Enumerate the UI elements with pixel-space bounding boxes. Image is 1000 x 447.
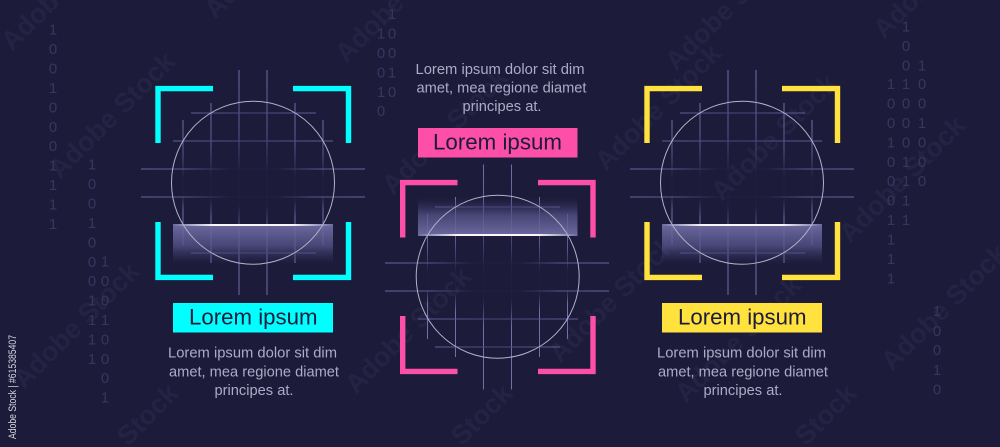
description text: Lorem ipsum dolor sit dim — [168, 346, 337, 362]
watermark pattern: Adobe Stock — [543, 230, 682, 368]
binary column: far left: 1 — [49, 196, 57, 214]
binary column: left third: 0 — [101, 332, 109, 348]
description text: principes at. — [462, 99, 542, 115]
binary column: far left: 1 — [49, 177, 57, 194]
binary column: left second: 1 — [88, 215, 96, 232]
binary column: top middle A: 0 — [377, 64, 385, 82]
description text: amet, mea regione diamet — [416, 81, 586, 97]
binary column: top middle B: 1 — [388, 64, 396, 82]
binary column: right second: 1 — [902, 18, 910, 36]
binary column: lower right: 0 — [933, 323, 941, 340]
description text: principes at. — [214, 383, 294, 399]
viewfinder brackets — [403, 183, 593, 371]
binary column: right second: 0 — [902, 96, 910, 112]
description text: Lorem ipsum dolor sit dim — [416, 62, 584, 78]
binary column: far left: 0 — [49, 119, 57, 136]
binary column: right first: 1 — [887, 270, 895, 288]
binary column: top middle A: 1 — [377, 26, 385, 42]
watermark pattern: Adobe Stock — [376, 62, 515, 200]
binary column: right first: 1 — [887, 212, 895, 229]
binary column: right first: 0 — [887, 173, 895, 190]
glow platform — [418, 198, 578, 236]
binary column: left third: 0 — [101, 292, 109, 310]
heading label: Lorem ipsum — [189, 304, 318, 330]
binary column: right first: 1 — [887, 251, 895, 268]
description text: amet, mea regione diamet — [658, 364, 828, 380]
binary column: left second: 0 — [88, 234, 96, 252]
binary column: right second: 1 — [902, 154, 910, 171]
description text — [657, 346, 828, 399]
binary column: lower right: 0 — [933, 342, 941, 359]
watermark pattern: Adobe Stock — [833, 110, 972, 248]
binary column: right third: 0 — [918, 96, 926, 112]
binary column: left second: 0 — [88, 273, 96, 290]
binary column: top middle B: 1 — [388, 6, 396, 23]
viewfinder brackets — [647, 89, 838, 277]
binary column: right second: 1 — [902, 192, 910, 210]
binary column: lower right: 1 — [933, 362, 941, 379]
binary column: top middle B: 0 — [388, 45, 396, 62]
binary column: left third: 1 — [101, 312, 109, 329]
binary column: lower right: 1 — [933, 303, 941, 320]
watermark pattern: Adobe Stock — [7, 256, 146, 394]
binary column: right second: 1 — [902, 212, 910, 229]
watermark pattern: Adobe Stock — [589, 38, 728, 176]
binary column: far left: 0 — [49, 60, 57, 78]
binary column: top middle B: 0 — [388, 26, 396, 42]
binary column: left third: 0 — [101, 370, 109, 387]
binary column: right third: 1 — [918, 58, 926, 74]
binary column: left third: 0 — [101, 351, 109, 368]
binary column: right second: 0 — [902, 115, 910, 132]
glow platform — [662, 224, 822, 264]
panel: middle pink — [385, 62, 609, 390]
binary column: right first: 0 — [887, 154, 895, 171]
description text — [168, 346, 339, 399]
watermark pattern: Adobe Stock — [669, 270, 808, 408]
panel: left cyan — [141, 70, 365, 399]
binary column: right third: 0 — [918, 154, 926, 171]
description text: principes at. — [704, 383, 782, 399]
binary column: right first: 1 — [887, 76, 895, 93]
scan circle — [416, 195, 579, 358]
binary column: right second: 1 — [902, 76, 910, 93]
binary column: far left: 1 — [49, 80, 57, 97]
binary column: left second: 0 — [88, 254, 96, 271]
binary column: left second: 1 — [88, 312, 96, 329]
heading label: Lorem ipsum — [433, 130, 562, 154]
binary column: left second: 0 — [88, 176, 96, 193]
description text: amet, mea regione diamet — [169, 364, 339, 380]
scan circle — [660, 101, 824, 264]
binary column: lower right: 0 — [933, 382, 941, 398]
binary column: right first: 0 — [887, 192, 895, 210]
binary column: right first: 1 — [887, 134, 895, 152]
binary column: far left: 1 — [49, 158, 57, 174]
binary column: right second: 0 — [902, 38, 910, 55]
heading label — [418, 128, 578, 158]
heading label — [662, 303, 822, 332]
watermark pattern: Adobe Stock — [43, 46, 182, 184]
binary column: right first: 1 — [887, 232, 895, 248]
binary column: right second: 1 — [902, 173, 910, 190]
binary column: left third: 1 — [101, 254, 109, 270]
scan circle — [172, 101, 334, 264]
glow platform — [173, 224, 333, 264]
scan grid — [141, 70, 365, 295]
binary column: right third: 0 — [918, 76, 926, 93]
binary column: top middle A: 0 — [377, 45, 385, 62]
heading label: Lorem ipsum — [678, 304, 806, 330]
binary column: right third: 1 — [918, 115, 926, 132]
binary column: top middle A: 1 — [377, 84, 385, 101]
binary column: top middle B: 0 — [388, 84, 396, 101]
binary column: left third: 1 — [101, 390, 109, 406]
binary column: far left: 0 — [49, 41, 57, 58]
watermark pattern: Adobe Stock — [705, 68, 844, 206]
description text: Lorem ipsum dolor sit dim — [657, 346, 826, 362]
binary column: right second: 0 — [902, 134, 910, 152]
watermark pattern: Adobe Stock — [339, 261, 478, 399]
binary column: right third: 0 — [918, 134, 926, 152]
binary column: right first: 0 — [887, 115, 895, 132]
stock credit: Adobe Stock | #615385407 — [7, 335, 19, 439]
panel: right yellow — [630, 70, 854, 399]
scan grid — [630, 70, 854, 295]
binary column: left second: 1 — [88, 292, 96, 310]
binary column: far left: 1 — [49, 216, 57, 233]
binary column: far left: 0 — [49, 100, 57, 116]
description text — [416, 62, 586, 115]
binary column: right second: 0 — [902, 58, 910, 74]
binary column: top middle A: 0 — [377, 103, 385, 120]
viewfinder brackets — [158, 89, 348, 277]
binary column: far left: 1 — [49, 22, 57, 38]
binary column: left second: 0 — [88, 196, 96, 212]
binary column: right first: 0 — [887, 96, 895, 112]
binary column: left second: 1 — [88, 332, 96, 348]
binary column: right third: 0 — [918, 173, 926, 190]
binary column: left third: 0 — [101, 273, 109, 290]
binary column: left second: 1 — [88, 351, 96, 368]
heading label — [173, 303, 333, 332]
binary column: far left: 0 — [49, 138, 57, 155]
binary column: left second: 1 — [88, 156, 96, 174]
scan grid — [385, 164, 609, 390]
